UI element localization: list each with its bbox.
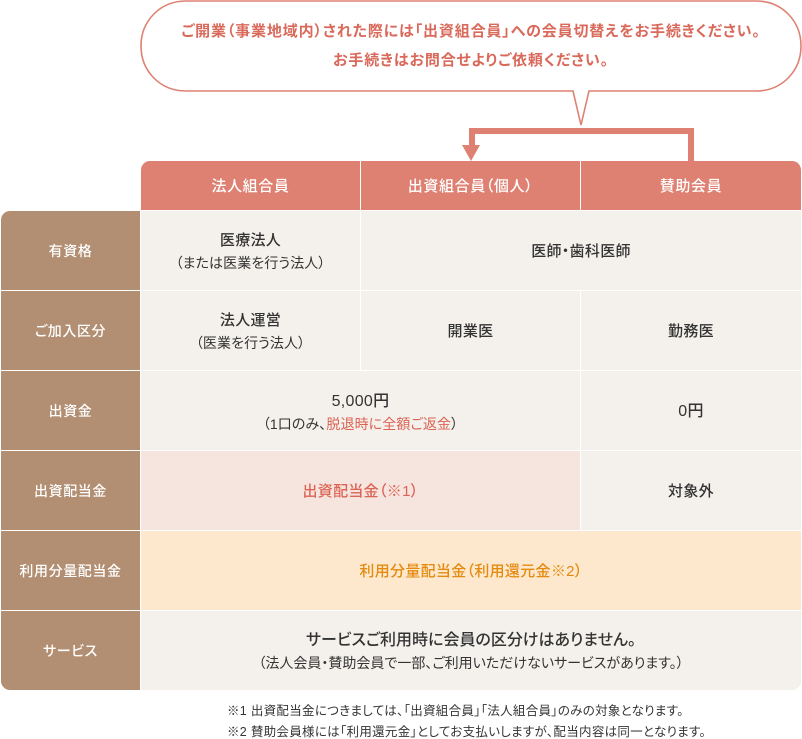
cell: corporate operation [141,291,360,370]
column header: corporate member: 法人組合員 [211,178,290,195]
cell: usage dividend [141,531,801,610]
row label: investment: 出資金 [49,402,92,418]
cell: usage dividend: 利用分量配当金（利用還元金※2） [359,562,583,580]
footnotes [227,704,706,739]
column header: supporting member [581,161,801,210]
callout bubble with arrow connector [140,0,802,161]
footnotes: ※1 出資配当金につきましては、「出資組合員」「法人組合員」のみの対象となります。 [227,704,684,718]
cell: 0 yen: 0円 [678,402,704,420]
cell: corporate operation: （医業を行う法人） [196,334,305,350]
row label: membership category: ご加入区分 [35,322,106,338]
column header: supporting member: 賛助会員 [660,178,722,195]
cell: 5,000 yen: 5,000円 [332,393,389,410]
cell: investment dividend: 出資配当金（※1） [302,482,419,500]
cell: employed doctor [581,291,801,370]
cell: doctors and dentists: 医師・歯科医師 [531,242,631,260]
cell: medical corporation: 医療法人 [220,232,281,248]
cell: service note: （法人会員・賛助会員で一部、ご利用いただけないサービスがあります。） [258,655,684,671]
cell: medical corporation: （または医業を行う法人） [175,254,326,270]
cell: service note [141,611,801,690]
cell: corporate operation: 法人運営 [220,312,281,328]
row label: usage dividend [1,531,140,610]
row label: qualification: 有資格 [49,242,92,258]
column header: individual member [361,161,580,210]
column header: corporate member [141,161,360,210]
row label: membership category [1,291,140,370]
cell: employed doctor: 勤務医 [668,322,714,340]
callout speech bubble [141,1,801,125]
row label: usage dividend: 利用分量配当金 [19,562,122,578]
cell: 5,000 yen: （1口のみ、脱退時に全額ご返金） [263,416,458,432]
cell: not applicable: 対象外 [668,482,714,500]
cell: service note: サービスご利用時に会員の区分けはありません。 [306,632,636,649]
column header: individual member: 出資組合員（個人） [408,178,533,195]
cell: doctors and dentists [361,211,801,290]
footnotes: ※2 賛助会員様には「利用還元金」としてお支払いしますが、配当内容は同一となります。 [227,725,706,739]
row label: investment [1,371,140,450]
cell: practicing doctor: 開業医 [448,322,493,340]
row label: services: サービス [43,642,98,658]
cell: not applicable [581,451,801,530]
row label: dividend [1,451,140,530]
cell: investment dividend [141,451,580,530]
row label: dividend: 出資配当金 [34,482,107,498]
row label: services [1,611,140,690]
cell: 5,000 yen [141,371,580,450]
arrow: sponsor to individual member [462,131,691,161]
row label: qualification [1,211,140,290]
cell: practicing doctor [361,291,580,370]
callout text [181,23,761,69]
cell: 0 yen [581,371,801,450]
callout text: お手続きはお問合せよりご依頼ください。 [333,52,609,69]
cell: medical corporation [141,211,360,290]
callout text: ご開業（事業地域内）された際には「出資組合員」への会員切替えをお手続きください。 [181,23,761,40]
